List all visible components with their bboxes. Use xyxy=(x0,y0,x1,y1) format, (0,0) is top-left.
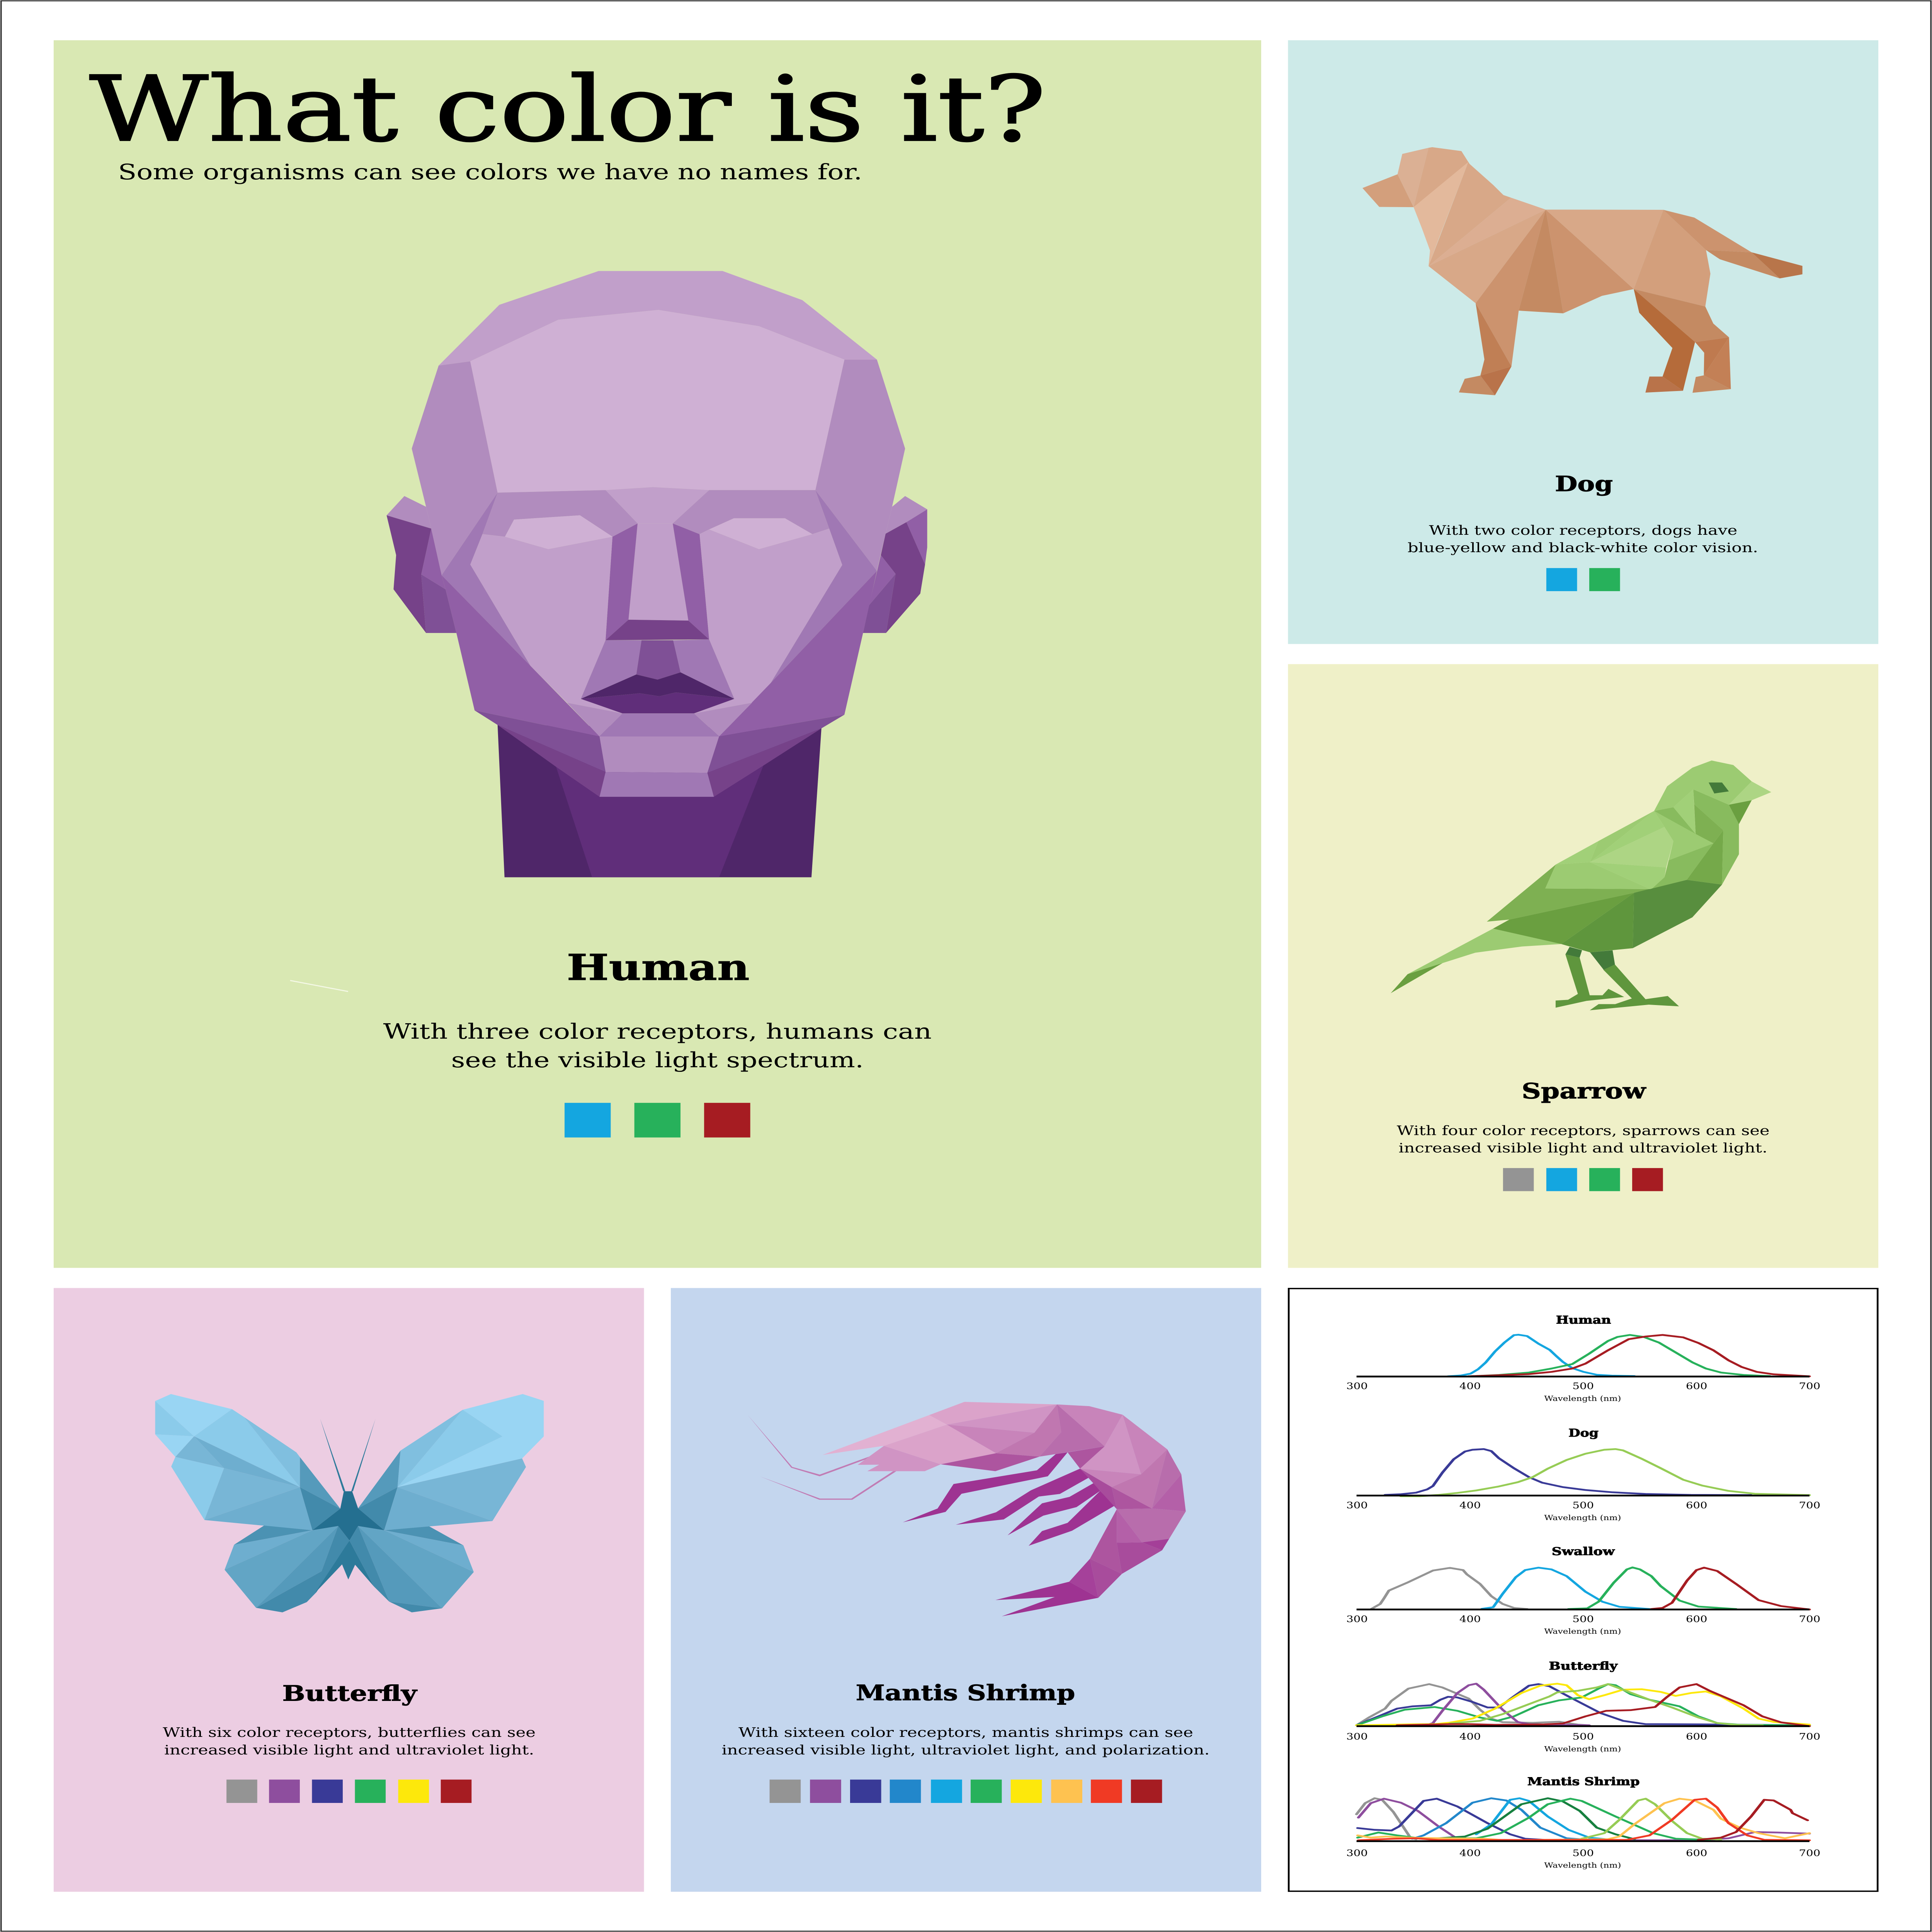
description: mantis shrimp xyxy=(722,1725,1210,1758)
chart: swallow: 300 xyxy=(1346,1614,1368,1624)
icon: mantis shrimp xyxy=(748,1402,1186,1616)
title: What color is it? xyxy=(89,57,1046,162)
chart: human: 700 xyxy=(1799,1381,1820,1391)
chart: butterfly: 300 xyxy=(1346,1731,1368,1742)
icon: dog xyxy=(1362,147,1803,395)
description: dog xyxy=(1408,523,1758,556)
chart: human: 600 xyxy=(1686,1381,1708,1391)
chart: swallow: 500 xyxy=(1572,1614,1594,1624)
heading: butterfly: Butterfly xyxy=(282,1681,418,1706)
chart: swallow: 600 xyxy=(1686,1614,1708,1624)
chart: butterfly xyxy=(1346,1660,1820,1753)
chart: mantis shrimp: Wavelength (nm) xyxy=(1544,1861,1621,1869)
panel: human xyxy=(54,40,1261,1268)
chart: dog: 300 xyxy=(1346,1500,1368,1510)
chart: swallow: 400 xyxy=(1459,1614,1481,1624)
description: dog: With two color receptors, dogs have xyxy=(1429,523,1737,538)
chart: dog: 700 xyxy=(1799,1500,1820,1510)
description: mantis shrimp: increased visible light, ultraviolet light, and polarization. xyxy=(722,1743,1210,1758)
description: sparrow: With four color receptors, sparrows can see xyxy=(1397,1124,1770,1138)
chart: butterfly: 600 xyxy=(1686,1731,1708,1742)
description: human: With three color receptors, humans can xyxy=(383,1020,932,1044)
swatches: butterfly xyxy=(226,1780,471,1803)
chart: dog xyxy=(1346,1427,1820,1522)
chart: human: 500 xyxy=(1572,1381,1594,1391)
chart: butterfly: 400 xyxy=(1459,1731,1481,1742)
swatches: human xyxy=(565,1103,750,1138)
chart: human xyxy=(1346,1313,1820,1403)
swatches: dog xyxy=(1546,568,1620,591)
icon: sparrow xyxy=(1391,760,1771,1010)
description: human xyxy=(383,1020,932,1072)
chart: human: 400 xyxy=(1459,1381,1481,1391)
chart: dog: Dog xyxy=(1568,1427,1599,1439)
chart: butterfly: 700 xyxy=(1799,1731,1820,1742)
chart: mantis shrimp: 500 xyxy=(1572,1847,1594,1858)
description: butterfly: With six color receptors, butterflies can see xyxy=(163,1725,536,1740)
heading: human: Human xyxy=(567,947,750,988)
icon: butterfly xyxy=(155,1394,544,1612)
chart: dog: Wavelength (nm) xyxy=(1544,1514,1621,1522)
subtitle: Some organisms can see colors we have no names for. xyxy=(118,160,862,184)
chart: butterfly: 500 xyxy=(1572,1731,1594,1742)
description: butterfly: increased visible light and ultraviolet light. xyxy=(164,1743,534,1758)
chart: mantis shrimp: 300 xyxy=(1346,1847,1368,1858)
chart: human: 300 xyxy=(1346,1381,1368,1391)
chart: swallow xyxy=(1346,1545,1820,1636)
swatches: mantis shrimp xyxy=(770,1780,1162,1803)
chart: dog: 500 xyxy=(1572,1500,1594,1510)
chart: mantis shrimp: 700 xyxy=(1799,1847,1820,1858)
heading: dog: Dog xyxy=(1555,472,1613,496)
panel: butterfly xyxy=(54,1288,644,1892)
chart: butterfly: Wavelength (nm) xyxy=(1544,1745,1621,1753)
panel: dog xyxy=(1288,40,1878,644)
heading: sparrow: Sparrow xyxy=(1522,1078,1646,1104)
chart: swallow: Swallow xyxy=(1552,1545,1615,1558)
description: butterfly xyxy=(163,1725,536,1758)
chart: mantis shrimp: 400 xyxy=(1459,1847,1481,1858)
description: mantis shrimp: With sixteen color receptors, mantis shrimps can see xyxy=(738,1725,1193,1740)
chart: dog: 400 xyxy=(1459,1500,1481,1510)
icon: human head xyxy=(387,271,927,877)
description: sparrow xyxy=(1397,1124,1770,1156)
chart: butterfly: Butterfly xyxy=(1549,1660,1618,1672)
heading: mantis shrimp: Mantis Shrimp xyxy=(856,1680,1075,1706)
panel: sparrow xyxy=(1288,664,1878,1268)
swatches: sparrow xyxy=(1503,1168,1663,1191)
description: dog: blue-yellow and black-white color vision. xyxy=(1408,541,1758,556)
chart: dog: 600 xyxy=(1686,1500,1708,1510)
description: sparrow: increased visible light and ultraviolet light. xyxy=(1398,1141,1767,1156)
chart: mantis shrimp: Mantis Shrimp xyxy=(1527,1775,1640,1788)
chart: swallow: 700 xyxy=(1799,1614,1820,1624)
chart: mantis shrimp xyxy=(1346,1775,1820,1869)
chart: swallow: Wavelength (nm) xyxy=(1544,1627,1621,1636)
chart: mantis shrimp: 600 xyxy=(1686,1847,1708,1858)
panel: sensitivity charts xyxy=(1289,1289,1878,1891)
description: human: see the visible light spectrum. xyxy=(451,1048,864,1072)
chart: human: Human xyxy=(1556,1313,1611,1326)
chart: human: Wavelength (nm) xyxy=(1544,1395,1621,1403)
panel: mantis shrimp xyxy=(671,1288,1261,1892)
